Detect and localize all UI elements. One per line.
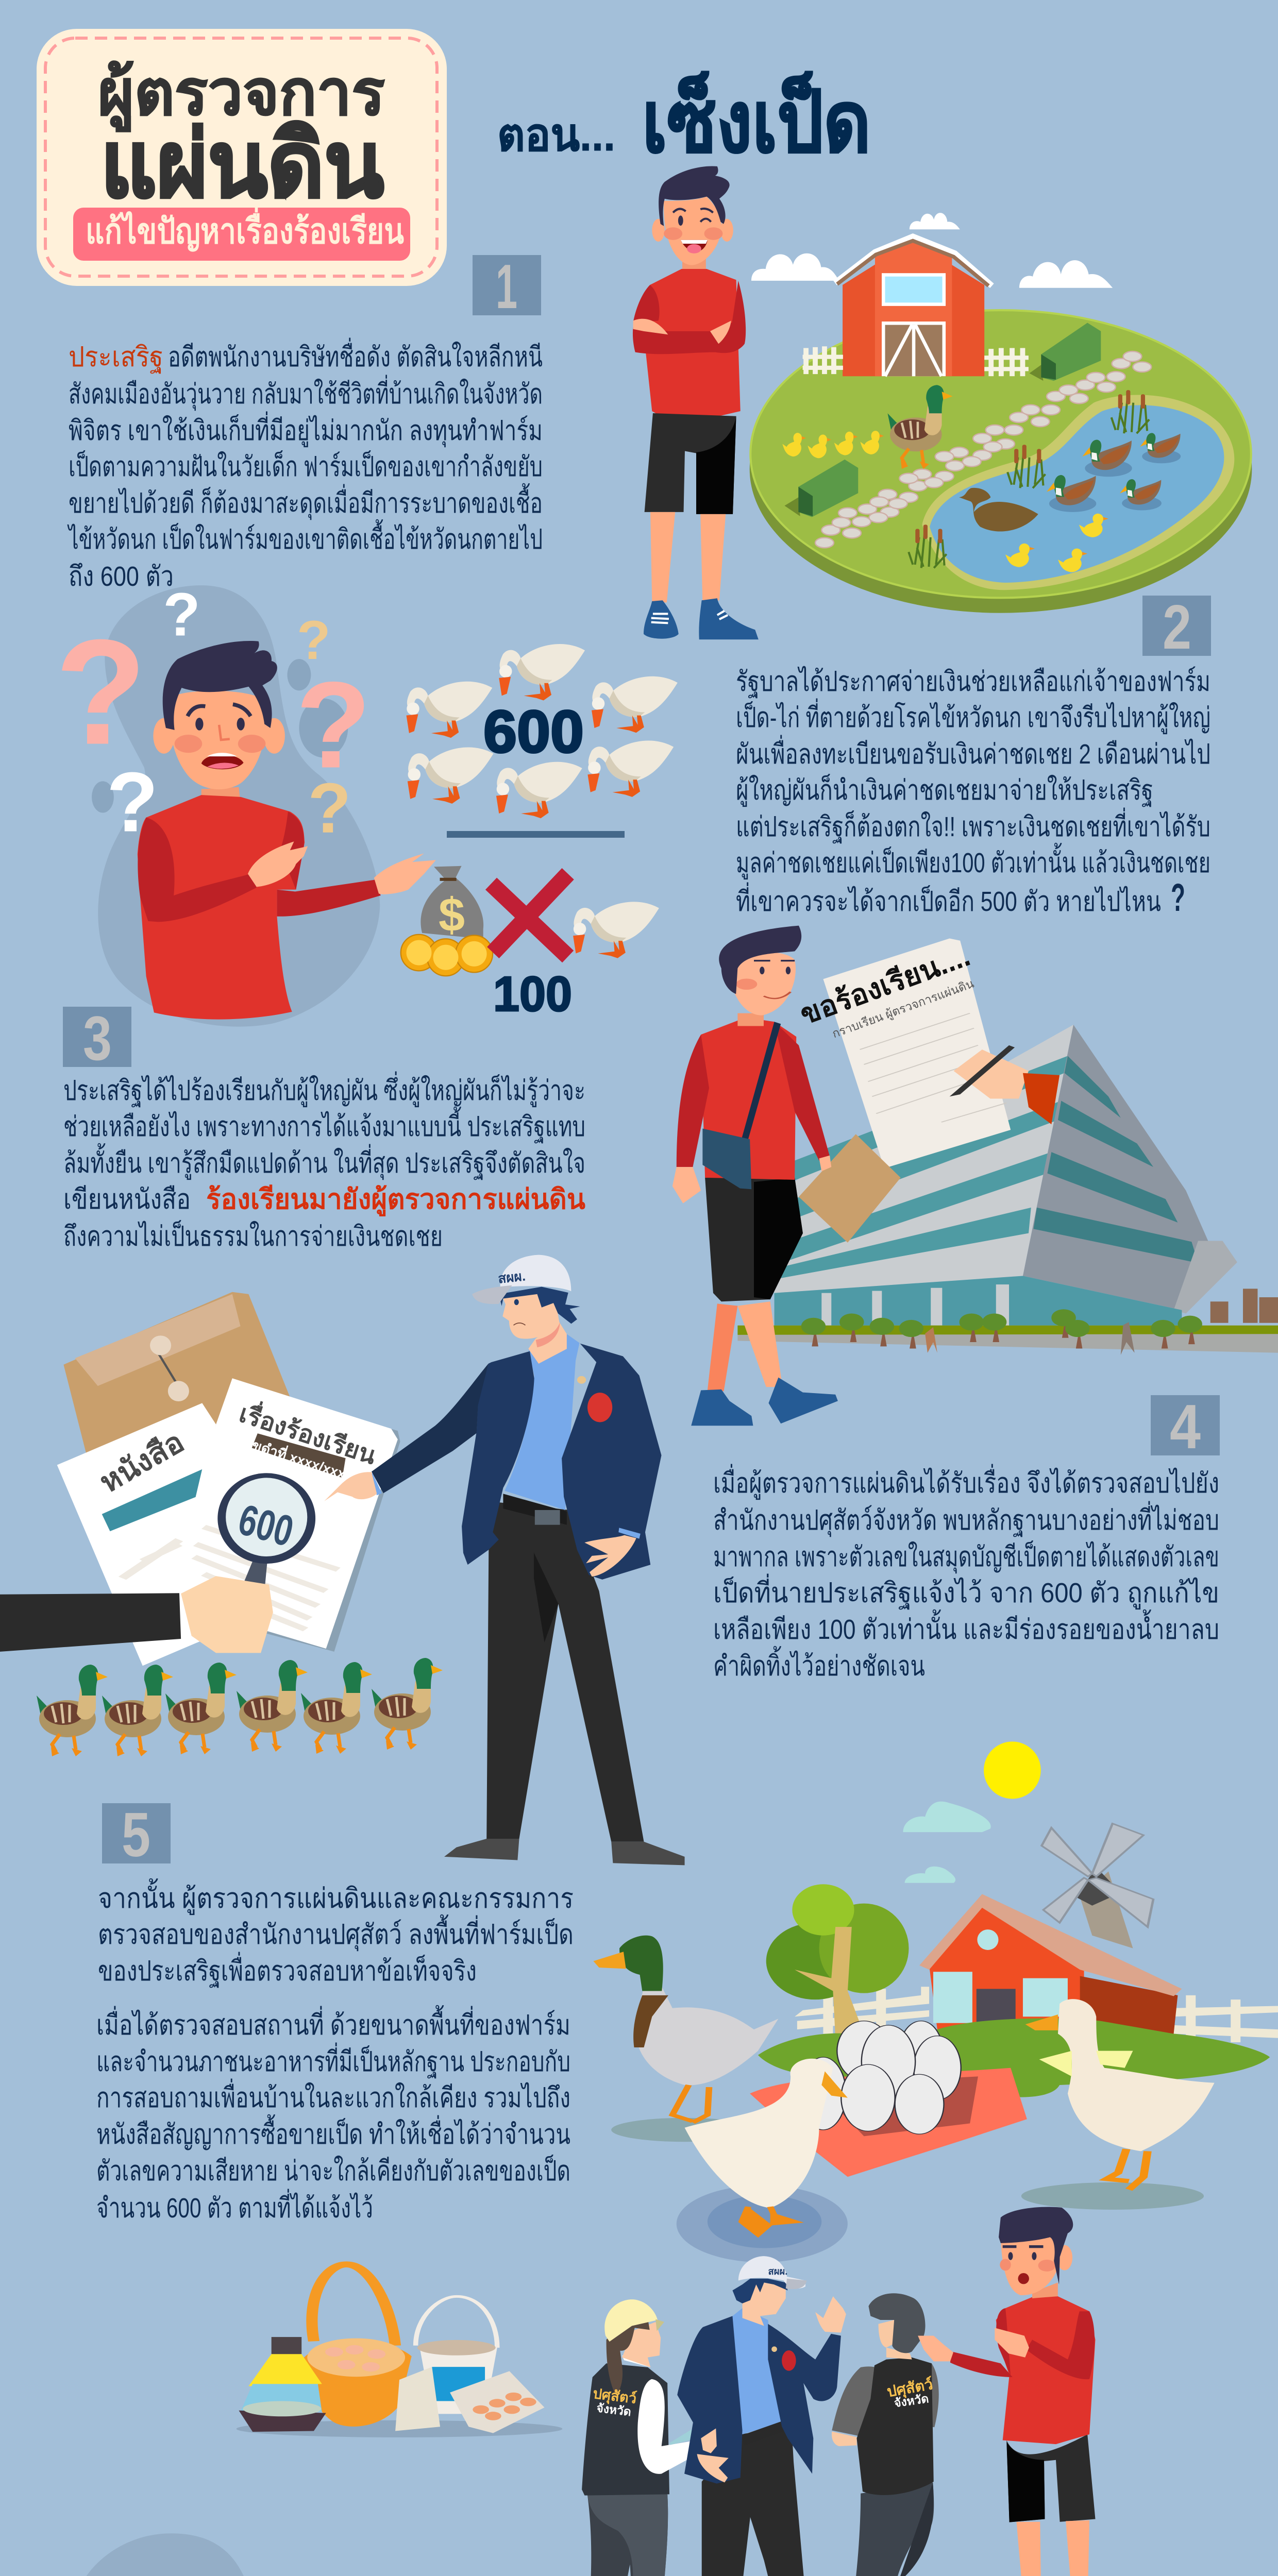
- hedges: [784, 323, 1101, 517]
- number: 600: 600: [483, 698, 584, 765]
- text block 5: ของประเสริฐเพื่อตรวจสอบหาข้อเท็จจริง: [98, 1952, 477, 1988]
- text block 1: ขยายไปด้วยดี ก็ต้องมาสะดุดเมื่อมีการระบาดของเชื้อ: [69, 483, 543, 520]
- pond: [922, 395, 1234, 590]
- vest label: ปศุสัตว์: [592, 2385, 637, 2408]
- illustration: feed basket, lantern and egg tray: [237, 2264, 562, 2437]
- text block 2: [736, 666, 1210, 920]
- bucket: [416, 2296, 497, 2414]
- egg tray: [450, 2371, 545, 2433]
- subtitle ribbon: แก้ไขปัญหาเรื่องร้องเรียน: [86, 206, 404, 252]
- tree: [766, 1884, 909, 2038]
- eggs: [800, 2021, 961, 2134]
- farmer in red: [918, 2207, 1096, 2576]
- number badge 4: 4: [1170, 1392, 1201, 1462]
- illustration: inspectors talking with farmer: [582, 2207, 1096, 2576]
- text block 5: จากนั้น ผู้ตรวจการแผ่นดินและคณะกรรมการ: [98, 1878, 574, 1915]
- text block 3: [63, 1071, 585, 1252]
- illustration: farm scene with geese and eggs: [593, 1741, 1278, 2262]
- text block 5: จำนวน 600 ตัว ตามที่ได้แจ้งไว้: [96, 2189, 373, 2224]
- text block 5: เมื่อได้ตรวจสอบสถานที่ ด้วยขนาดพื้นที่ของฟาร์ม: [96, 2005, 570, 2041]
- clouds: [751, 213, 1113, 288]
- text block 4: คำผิดทิ้งไว้อย่างชัดเจน: [713, 1646, 925, 1682]
- illustration: smiling farmer with goose and approval documents: [32, 2533, 685, 2576]
- subtitle ribbon: [73, 206, 410, 261]
- vest label: [592, 2385, 637, 2418]
- complaint sheet: [183, 1378, 400, 1652]
- feed bag: [395, 2367, 440, 2431]
- officer man: [829, 2293, 941, 2576]
- cap initials: สผผ.: [768, 2266, 787, 2277]
- illustration: six geese: [406, 644, 678, 818]
- vest label: ปศุสัตว์: [885, 2375, 934, 2401]
- letter title: ขอร้องเรียน....: [796, 939, 974, 1030]
- question marks: ?: [308, 769, 351, 848]
- number badge 1: 1: [496, 251, 517, 321]
- text block 5: ตัวเลขความเสียหาย น่าจะใกล้เคียงกับตัวเลขของเป็ด: [96, 2155, 570, 2187]
- document labels: 600: [233, 1495, 298, 1556]
- number badge 5: [102, 1800, 171, 1870]
- document labels: เลขดำที่ xxxx/xxxx: [238, 1431, 356, 1484]
- question marks: ?: [107, 754, 158, 849]
- illustration: office building: [737, 1025, 1278, 1355]
- lantern feeder: [239, 2337, 326, 2432]
- heading: ombudsman: ผู้ตรวจการ: [98, 58, 385, 132]
- text block 1: ถึง 600 ตัว: [69, 561, 174, 592]
- complaint letter: [823, 939, 1011, 1168]
- fraction divider: [447, 831, 625, 838]
- illustration: ombudsman inspector: [324, 1255, 685, 1865]
- document labels: หนังสือ: [94, 1425, 190, 1499]
- text block 1: เป็ดตามความฝันในวัยเด็ก ฟาร์มเป็ดของเขากำลังขยับ: [69, 450, 543, 482]
- vest label: จังหวัด: [893, 2392, 930, 2410]
- swimming ducks: [1047, 433, 1181, 512]
- stone path: [815, 351, 1151, 548]
- right goose shadow: [1021, 2182, 1204, 2210]
- question marks: ?: [55, 608, 146, 776]
- text block 4: [713, 1464, 1219, 1682]
- letter back sheet: [57, 1403, 216, 1666]
- green bushes: [758, 2019, 1270, 2097]
- number badge 2: [1142, 592, 1211, 662]
- fence: [803, 346, 1029, 376]
- text block 4: เป็ดที่นายประเสริฐแจ้งไว้ จาก 600 ตัว ถูกแก้ไข: [713, 1573, 1219, 1609]
- question marks: ?: [163, 581, 200, 649]
- text block 1: ประเสริฐ: [69, 342, 163, 374]
- title card: [37, 29, 447, 286]
- number: 100: 100: [493, 967, 572, 1022]
- number badge 1: [473, 251, 541, 321]
- question marks: [55, 581, 371, 849]
- farmer shoes: [691, 1378, 838, 1426]
- illustration: worried farmer with question marks: [55, 581, 436, 1027]
- text block 5: และจำนวนภาชนะอาหารที่มีเป็นหลักฐาน ประกอบกับ: [96, 2042, 570, 2078]
- mallard on grass: [887, 385, 953, 469]
- yellow ducklings in pond: [1005, 514, 1108, 572]
- number badge 3: [63, 1003, 131, 1073]
- magnifier: [217, 1473, 315, 1587]
- text block 1: พิจิตร เขาใช้เงินเก็บที่มีอยู่ไม่มากนัก ลงทุนทำฟาร์ม: [69, 411, 543, 448]
- text block 5: [96, 1878, 574, 2224]
- text block 5: ตรวจสอบของสำนักงานปศุสัตว์ ลงพื้นที่ฟาร์มเป็ด: [98, 1914, 574, 1952]
- question marks: ?: [297, 609, 330, 671]
- text block 3: เขียนหนังสือ: [63, 1184, 191, 1215]
- text block 5: การสอบถามเพื่อนบ้านในละแวกใกล้เคียง รวมไปถึง: [96, 2078, 570, 2113]
- text block 5: หนังสือสัญญาการซื้อขายเป็ด ทำให้เชื่อได้ว่าจำนวน: [96, 2114, 570, 2150]
- gripping hand: [0, 1576, 273, 1653]
- illustration: documents with magnifier: [0, 1292, 400, 1666]
- mallard shadow: [611, 2118, 758, 2142]
- ducklings on grass: [782, 431, 884, 458]
- nest: [750, 2068, 1027, 2177]
- island ground: [750, 310, 1252, 613]
- big mallard: [593, 1936, 778, 2123]
- right goose: [1025, 1999, 1215, 2190]
- text block 2: ที่เขาควรจะได้จากเป็ดอีก 500 ตัว หายไปไหน: [736, 882, 1161, 917]
- backdrop blob: [57, 2533, 343, 2576]
- text block 2: ผู้ใหญ่ผันก็นำเงินค่าชดเชยมาจ่ายให้ประเสริฐ: [736, 774, 1153, 807]
- number badge 4: [1151, 1392, 1220, 1462]
- heading: land: แผ่นดิน: [100, 113, 384, 216]
- white goose: [685, 2059, 848, 2234]
- text block 1: ไข้หวัดนก เป็ดในฟาร์มของเขาติดเชื้อไข้หวัดนกตายไป: [67, 519, 543, 555]
- water ring: [677, 2185, 848, 2262]
- letter subtitle: กราบเรียน ผู้ตรวจการแผ่นดิน: [830, 976, 976, 1041]
- text block 3: ถึงความไม่เป็นธรรมในการจ่ายเงินชดเชย: [63, 1220, 443, 1252]
- text block 3: ล้มทั้งยืน เขารู้สึกมืดแปดด้าน ในที่สุด ประเสริฐจึงตัดสินใจ: [63, 1143, 585, 1180]
- document labels: [94, 1396, 381, 1556]
- fence: [795, 1987, 1278, 2042]
- episode heading: ตอน...: [497, 109, 615, 160]
- sun: [984, 1741, 1041, 1799]
- windmill: [1041, 1824, 1153, 1948]
- barn: [835, 236, 992, 376]
- illustration: duck farm island: [750, 213, 1252, 613]
- inspector: [675, 2256, 848, 2576]
- basket: [303, 2264, 412, 2427]
- text block 2: ?: [1171, 876, 1185, 920]
- barn: [919, 1894, 1182, 2033]
- text block 3: ประเสริฐได้ไปร้องเรียนกับผู้ใหญ่ผัน ซึ่งผู้ใหญ่ผันก็ไม่รู้ว่าจะ: [63, 1071, 585, 1107]
- writing hand and pen: [950, 1045, 1060, 1124]
- episode heading: [497, 71, 871, 170]
- envelope: [63, 1292, 297, 1467]
- text block 1: [67, 337, 543, 592]
- envelope: [799, 1134, 901, 1243]
- vest label: จังหวัด: [596, 2401, 632, 2418]
- cap initials: สผผ.: [497, 1268, 526, 1286]
- number badge 3: 3: [83, 1003, 112, 1073]
- light clouds: [903, 1802, 991, 1883]
- shadow: [237, 2420, 562, 2437]
- illustration: farmer writing complaint: [672, 926, 1060, 1426]
- text block 1: สังคมเมืองอันวุ่นวาย กลับมาใช้ชีวิตที่บ้านเกิดในจังหวัด: [69, 375, 543, 411]
- episode heading: เซ็งเป็ด: [642, 71, 871, 170]
- icon: money bag, coins, red cross and goose: $: [439, 889, 465, 941]
- icon: money bag, coins, red cross and goose: [401, 866, 659, 976]
- document labels: เรื่องร้องเรียน: [236, 1396, 381, 1470]
- text block 3: ร้องเรียนมายังผู้ตรวจการแผ่นดิน: [206, 1184, 585, 1216]
- six mallards in a row: [37, 1658, 443, 1756]
- brown duck: [959, 488, 1038, 532]
- text block 3: ช่วยเหลือยังไง เพราะทางการได้แจ้งมาแบบนี้ ประเสริฐแทบ: [63, 1107, 585, 1143]
- officer woman: [582, 2299, 731, 2576]
- number badge 2: 2: [1163, 592, 1191, 662]
- reeds: [909, 390, 1149, 568]
- vest label: [885, 2375, 934, 2410]
- number badge 5: 5: [122, 1800, 150, 1870]
- illustration: farmer with crossed arms: [633, 166, 759, 639]
- text block 1: อดีตพนักงานบริษัทชื่อดัง ตัดสินใจหลีกหนี: [168, 337, 543, 372]
- question marks: ?: [296, 656, 371, 794]
